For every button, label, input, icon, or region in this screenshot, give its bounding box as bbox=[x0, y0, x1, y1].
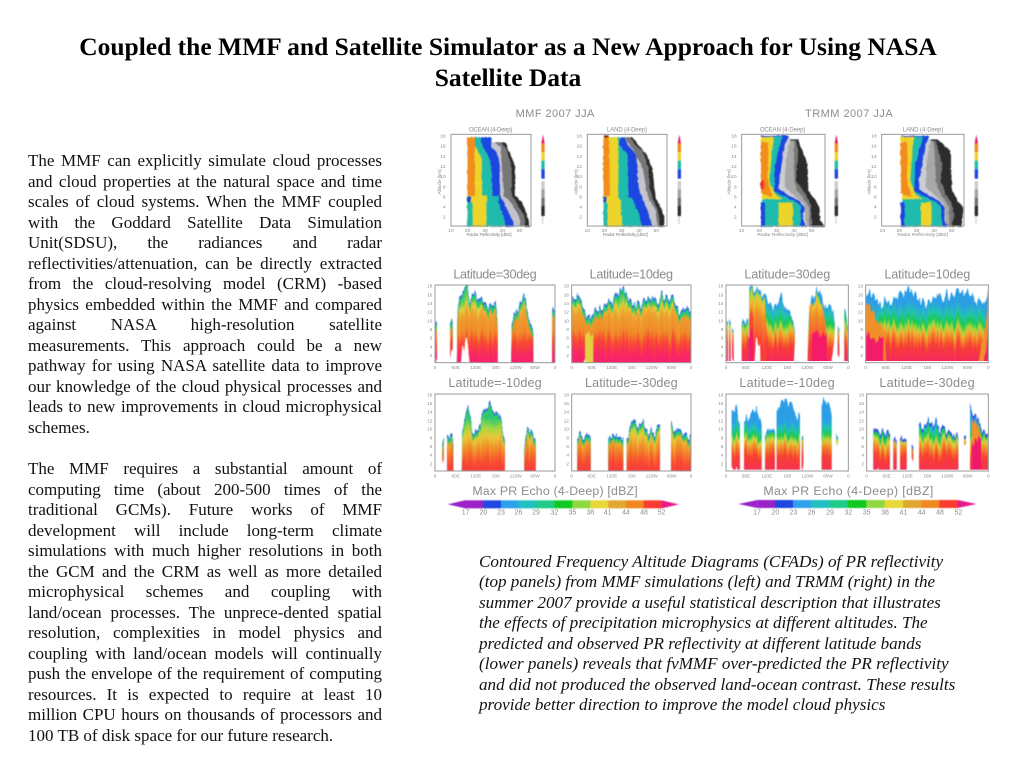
text block: future works paragraph: million CPU hours on thousands of processors and bbox=[28, 705, 382, 724]
chart: MMF ocean CFAD: 18 bbox=[440, 133, 446, 139]
legend: MMF colour bar: 20 bbox=[479, 510, 487, 517]
chart: MMF latitude 10: 16 bbox=[564, 292, 569, 297]
chart: MMF latitude 30 bbox=[428, 269, 556, 369]
chart: TRMM latitude -30: 6 bbox=[861, 444, 864, 449]
chart: MMF ocean CFAD: 14 bbox=[440, 154, 446, 160]
chart: TRMM latitude 10: 12 bbox=[858, 310, 863, 315]
legend: TRMM colour bar: 48 bbox=[936, 510, 944, 517]
chart: TRMM land CFAD: 10 bbox=[871, 174, 877, 180]
legend: MMF colour bar: 23 bbox=[497, 510, 505, 517]
legend title: TRMM max PR echo: Max PR Echo (4-Deep) [dBZ] bbox=[763, 484, 933, 498]
chart: TRMM latitude 10: 120E bbox=[901, 365, 912, 370]
text block: MMF approach paragraph: Unit(SDSU), the radiances and radar bbox=[28, 233, 382, 252]
text block: MMF approach paragraph bbox=[28, 151, 382, 436]
chart: TRMM land CFAD: 2 bbox=[874, 214, 877, 220]
chart: TRMM latitude 10: 0 bbox=[864, 365, 867, 370]
chart: TRMM latitude -10: 10 bbox=[718, 427, 724, 432]
chart: TRMM latitude 30: 0 bbox=[847, 365, 850, 370]
chart: MMF land CFAD: 6 bbox=[579, 194, 582, 200]
chart: TRMM latitude -10: 12 bbox=[718, 418, 724, 423]
chart: TRMM land CFAD: 30 bbox=[914, 228, 920, 234]
chart: TRMM latitude -30 bbox=[859, 376, 990, 483]
caption: (top panels) from MMF simulations (left) and TRMM (right) in the bbox=[479, 572, 935, 591]
chart: TRMM ocean CFAD: 6 bbox=[734, 194, 737, 200]
chart: TRMM land CFAD: 40 bbox=[931, 228, 937, 234]
chart: TRMM latitude -30: 60E bbox=[883, 473, 891, 478]
title: Coupled the MMF and Satellite Simulator as a New Approach for Using NASA bbox=[79, 32, 937, 61]
chart: TRMM ocean CFAD: OCEAN (4-Deep) bbox=[760, 127, 805, 133]
legend: TRMM colour bar: 23 bbox=[789, 510, 797, 517]
chart: MMF latitude -30: 18 bbox=[564, 392, 569, 397]
chart: MMF latitude 10: 180 bbox=[628, 365, 636, 370]
chart: TRMM land CFAD: 20 bbox=[897, 228, 902, 234]
chart: TRMM latitude -30: 16 bbox=[859, 401, 864, 406]
chart: TRMM land CFAD: 4 bbox=[874, 204, 877, 210]
chart: TRMM ocean CFAD: 20 bbox=[757, 228, 762, 234]
caption: (lower panels) reveals that fvMMF over-predicted the PR reflectivity bbox=[479, 654, 949, 673]
chart: MMF latitude 30: 0 bbox=[434, 365, 437, 370]
text block: MMF approach paragraph: physics embedded within the MMF and compared bbox=[28, 294, 382, 314]
chart: TRMM land CFAD: 8 bbox=[874, 184, 877, 190]
chart: MMF latitude 30: 16 bbox=[427, 292, 433, 297]
chart: MMF latitude 30: 60W bbox=[530, 365, 540, 370]
chart: MMF latitude -30: 60E bbox=[588, 473, 596, 478]
chart: MMF latitude -10: Latitude=-10deg bbox=[448, 376, 542, 390]
chart: MMF land CFAD: 4 bbox=[579, 204, 582, 210]
legend: TRMM colour bar: 35 bbox=[863, 510, 871, 517]
legend: MMF colour bar: 48 bbox=[640, 510, 648, 517]
chart: TRMM latitude -10: 120E bbox=[761, 473, 772, 478]
chart: MMF latitude -10: 6 bbox=[430, 444, 433, 449]
chart: MMF latitude 30: 8 bbox=[430, 327, 433, 332]
chart: TRMM latitude 30: Latitude=30deg bbox=[744, 268, 830, 282]
legend: MMF colour bar: 35 bbox=[568, 510, 576, 517]
legend: TRMM colour bar: 44 bbox=[918, 510, 926, 517]
text block: future works paragraph: The MMF requires a substantial amount of bbox=[28, 459, 382, 478]
legend: MMF colour bar: 38 bbox=[586, 510, 594, 517]
chart: MMF latitude 10: 18 bbox=[564, 284, 569, 289]
title: Satellite Data bbox=[435, 63, 581, 92]
chart: MMF land CFAD: 20 bbox=[602, 228, 607, 234]
chart: TRMM ocean CFAD: 4 bbox=[734, 204, 737, 210]
chart: TRMM land CFAD: 18 bbox=[871, 133, 877, 139]
chart: MMF latitude -10: 120W bbox=[510, 473, 522, 478]
chart: MMF ocean CFAD: 10 bbox=[440, 174, 446, 180]
legend: TRMM colour bar: 41 bbox=[899, 510, 907, 517]
legend: TRMM colour bar: 52 bbox=[954, 510, 962, 517]
text block: MMF approach paragraph: The MMF can explicitly simulate cloud processes bbox=[28, 151, 382, 170]
chart: TRMM latitude -30: 4 bbox=[861, 453, 864, 458]
chart: MMF latitude -30: 8 bbox=[566, 435, 569, 440]
chart: MMF latitude 10: Latitude=10deg bbox=[590, 268, 673, 282]
group: TRMM latitude sections bbox=[718, 268, 990, 517]
chart: TRMM latitude -10: 60E bbox=[742, 473, 750, 478]
chart: MMF latitude 30: 18 bbox=[427, 284, 433, 289]
chart: TRMM latitude 10: 6 bbox=[860, 336, 863, 341]
chart: MMF latitude 10: 10 bbox=[564, 318, 569, 323]
chart: TRMM latitude -10: 60W bbox=[823, 473, 833, 478]
figure: CFADs and latitude sections bbox=[428, 110, 990, 514]
chart: MMF latitude -10 bbox=[428, 378, 556, 478]
chart: TRMM land CFAD: 16 bbox=[871, 144, 877, 150]
chart: TRMM land CFAD: 14 bbox=[871, 154, 877, 160]
chart: MMF latitude -30: 12 bbox=[564, 418, 569, 423]
chart: TRMM latitude -30: 180 bbox=[923, 473, 932, 478]
chart: MMF latitude -30: 0 bbox=[570, 473, 573, 478]
text block: future works paragraph: the GCM and the CRM as well as more detailed bbox=[28, 562, 382, 580]
chart: MMF latitude 30: 14 bbox=[427, 301, 433, 306]
chart: MMF latitude -10: 8 bbox=[430, 435, 433, 440]
chart: TRMM latitude -10: 8 bbox=[721, 435, 724, 440]
text block: MMF approach paragraph: against NASA high-resolution satellite bbox=[28, 315, 382, 334]
chart: TRMM ocean CFAD: 8 bbox=[734, 184, 737, 190]
legend: MMF colour bar: 26 bbox=[514, 510, 522, 517]
group: CFAD panels MMF bbox=[437, 108, 681, 238]
chart: MMF latitude -30: 16 bbox=[564, 401, 569, 406]
chart: MMF ocean CFAD bbox=[437, 127, 531, 238]
chart: MMF latitude -30: 6 bbox=[566, 444, 569, 449]
text block: future works paragraph: coupling with land/ocean models will continually bbox=[28, 644, 382, 662]
chart: MMF latitude 10 bbox=[564, 269, 692, 369]
chart: TRMM land CFAD: Altitude [km] bbox=[867, 169, 873, 195]
chart: TRMM latitude -10: 2 bbox=[721, 461, 724, 466]
chart: TRMM ocean CFAD: 30 bbox=[774, 228, 780, 234]
chart: TRMM land CFAD: 12 bbox=[871, 164, 877, 170]
text block: MMF approach paragraph: scales of cloud systems. When the MMF coupled bbox=[28, 192, 382, 211]
chart: TRMM latitude 10: 0 bbox=[987, 365, 990, 370]
chart: TRMM latitude 30: 60W bbox=[823, 365, 833, 370]
chart: MMF ocean CFAD: 6 bbox=[443, 194, 446, 200]
text block: future works paragraph: development will include long-term climate bbox=[28, 520, 382, 540]
chart: MMF latitude 30: 60E bbox=[452, 365, 460, 370]
chart: TRMM latitude 10: 8 bbox=[860, 327, 863, 332]
chart: TRMM latitude 30: 6 bbox=[721, 336, 724, 341]
chart: MMF ocean CFAD: 4 bbox=[443, 204, 446, 210]
title bbox=[79, 32, 937, 92]
chart: MMF ocean CFAD: 12 bbox=[440, 164, 446, 170]
chart: MMF latitude -10: 14 bbox=[427, 410, 433, 415]
chart: MMF land CFAD: 14 bbox=[576, 154, 582, 160]
chart: MMF land CFAD: LAND (4-Deep) bbox=[607, 127, 647, 133]
chart: TRMM latitude 30: 16 bbox=[718, 292, 724, 297]
chart: MMF latitude -10: 0 bbox=[554, 473, 557, 478]
chart: MMF latitude 30: 180 bbox=[492, 365, 500, 370]
chart: MMF latitude -30: 120W bbox=[646, 473, 658, 478]
chart: TRMM latitude -30: 10 bbox=[859, 427, 864, 432]
chart: TRMM land CFAD: LAND (4-Deep) bbox=[903, 127, 943, 133]
chart: MMF land CFAD: 10 bbox=[576, 174, 582, 180]
chart: TRMM latitude 10 bbox=[858, 268, 990, 377]
chart: MMF latitude -10: 12 bbox=[427, 418, 433, 423]
caption: predicted and observed PR reflectivity at different latitude bands bbox=[479, 634, 921, 653]
chart: TRMM latitude -30: 0 bbox=[987, 473, 990, 478]
chart: MMF land CFAD: 2 bbox=[579, 214, 582, 220]
chart: MMF latitude -30: 2 bbox=[566, 461, 569, 466]
text block: future works paragraph: resolution, complexities in model physics and bbox=[28, 623, 382, 642]
caption: provide better direction to improve the model cloud physics bbox=[479, 695, 885, 714]
text block: future works paragraph: land/ocean processes. The unprece-dented spatial bbox=[28, 602, 382, 622]
legend: MMF land colour scale bbox=[678, 134, 681, 224]
chart: TRMM land CFAD: Radar Reflectivity [dBZ] bbox=[897, 232, 949, 238]
chart: TRMM latitude -30: 120W bbox=[941, 473, 954, 478]
chart: TRMM latitude 30: 4 bbox=[721, 344, 724, 349]
chart: MMF latitude -30: 60W bbox=[667, 473, 677, 478]
chart: MMF ocean CFAD: Radar Reflectivity [dBZ] bbox=[466, 232, 512, 238]
chart: TRMM latitude -10: 18 bbox=[718, 392, 724, 397]
legend: TRMM colour bar: 38 bbox=[881, 510, 889, 517]
chart: MMF ocean CFAD: 2 bbox=[443, 214, 446, 220]
chart: TRMM latitude -30: 12 bbox=[859, 418, 864, 423]
chart: MMF ocean CFAD: 8 bbox=[443, 184, 446, 190]
chart: MMF ocean CFAD: 20 bbox=[465, 228, 471, 234]
chart: MMF land CFAD: 18 bbox=[576, 133, 582, 139]
chart: MMF latitude -30: 10 bbox=[564, 427, 569, 432]
chart: MMF latitude 30: 4 bbox=[430, 344, 433, 349]
chart: MMF latitude 30: 2 bbox=[430, 353, 433, 358]
text block: future works paragraph: resources. It is expected to require at least 10 bbox=[28, 684, 382, 704]
chart: TRMM ocean CFAD: 2 bbox=[734, 214, 737, 220]
chart: MMF latitude -10: 2 bbox=[430, 461, 433, 466]
chart: MMF land CFAD: 12 bbox=[576, 164, 582, 170]
chart: TRMM latitude -30: 8 bbox=[861, 435, 864, 440]
text block: MMF approach paragraph: measurements. This approach could be a new bbox=[28, 336, 382, 354]
chart: MMF latitude -10: 0 bbox=[434, 473, 437, 478]
chart: TRMM latitude -10: 180 bbox=[783, 473, 792, 478]
chart: MMF latitude -30: 4 bbox=[566, 453, 569, 458]
text block: MMF approach paragraph: schemes. bbox=[28, 418, 90, 436]
chart: MMF ocean CFAD: 50 bbox=[517, 228, 523, 234]
chart: MMF latitude 30: 0 bbox=[554, 365, 557, 370]
legend: TRMM colour bar: 29 bbox=[826, 510, 834, 517]
chart: TRMM latitude 30: 12 bbox=[718, 310, 724, 315]
chart: TRMM ocean CFAD: Radar Reflectivity [dBZ] bbox=[757, 232, 809, 238]
chart: MMF latitude -10: 10 bbox=[427, 427, 433, 432]
chart: TRMM latitude 10: 120W bbox=[941, 365, 954, 370]
caption: summer 2007 provide a useful statistical description that illustrates bbox=[479, 593, 941, 612]
chart: MMF latitude -30 bbox=[564, 376, 693, 487]
chart: TRMM ocean CFAD: 16 bbox=[731, 144, 737, 150]
heading: TRMM 2007 JJA: TRMM 2007 JJA bbox=[805, 108, 893, 120]
chart: TRMM latitude 10: 16 bbox=[858, 292, 863, 297]
chart: TRMM latitude -10: 120W bbox=[801, 473, 814, 478]
chart: TRMM latitude 30: 120E bbox=[761, 365, 772, 370]
chart: MMF latitude 10: 0 bbox=[690, 365, 693, 370]
chart: MMF latitude -30: Latitude=-30deg bbox=[585, 376, 678, 390]
chart: MMF latitude 30: 120E bbox=[470, 365, 481, 370]
chart: MMF ocean CFAD: 16 bbox=[440, 144, 446, 150]
chart: MMF latitude -10: 180 bbox=[492, 473, 500, 478]
legend: MMF colour bar: 52 bbox=[658, 510, 666, 517]
chart: TRMM ocean CFAD bbox=[727, 127, 825, 238]
chart: TRMM latitude -10: 4 bbox=[721, 453, 724, 458]
legend: TRMM ocean colour scale bbox=[835, 134, 838, 224]
chart: TRMM latitude -30: 120E bbox=[902, 473, 913, 478]
legend: TRMM land colour scale bbox=[975, 134, 978, 224]
chart: TRMM latitude 30: 120W bbox=[801, 365, 814, 370]
chart: TRMM land CFAD: 6 bbox=[874, 194, 877, 200]
chart: TRMM land CFAD bbox=[867, 127, 964, 238]
chart: MMF land CFAD: 30 bbox=[619, 228, 625, 234]
chart: TRMM ocean CFAD: 40 bbox=[791, 228, 797, 234]
text block: future works paragraph: computing time (about 200-500 times of the bbox=[28, 480, 382, 498]
chart: MMF latitude 30: 120W bbox=[510, 365, 522, 370]
chart: MMF ocean CFAD: 30 bbox=[482, 228, 488, 234]
legend: TRMM colour bar: 32 bbox=[844, 510, 852, 517]
chart: TRMM latitude 30: 2 bbox=[721, 353, 724, 358]
chart: MMF latitude 10: 120W bbox=[646, 365, 658, 370]
chart: TRMM latitude -10: 0 bbox=[725, 473, 728, 478]
chart: MMF latitude -10: 60W bbox=[530, 473, 540, 478]
chart: MMF ocean CFAD: OCEAN (4-Deep) bbox=[469, 127, 512, 133]
chart: MMF latitude 10: 6 bbox=[566, 336, 569, 341]
text block: future works paragraph bbox=[28, 459, 382, 744]
chart: TRMM latitude 10: 14 bbox=[858, 301, 863, 306]
chart: MMF latitude 30: 10 bbox=[427, 318, 433, 323]
chart: TRMM land CFAD: 50 bbox=[949, 228, 955, 234]
legend: MMF colour bar: 44 bbox=[622, 510, 630, 517]
chart: MMF land CFAD: 8 bbox=[579, 184, 582, 190]
legend: MMF colour bar: 32 bbox=[550, 510, 558, 517]
chart: TRMM latitude -30: 2 bbox=[861, 461, 864, 466]
caption bbox=[478, 552, 955, 714]
chart: MMF land CFAD: 10 bbox=[585, 228, 590, 234]
chart: MMF latitude 30: 12 bbox=[427, 310, 433, 315]
legend: TRMM colour bar: 26 bbox=[808, 510, 816, 517]
chart: TRMM latitude -30: 14 bbox=[859, 410, 864, 415]
chart: TRMM ocean CFAD: 18 bbox=[731, 133, 737, 139]
chart: MMF latitude 10: 0 bbox=[570, 365, 573, 370]
text block: future works paragraph: push the envelope of the requirement of computing bbox=[28, 664, 382, 683]
text block: MMF approach paragraph: and cloud properties at the natural space and time bbox=[28, 172, 382, 190]
chart: MMF latitude 10: 14 bbox=[564, 301, 569, 306]
text block: future works paragraph: microphysical schemes and coupling with bbox=[28, 582, 382, 601]
chart: MMF latitude 10: 120E bbox=[606, 365, 617, 370]
text block: MMF approach paragraph: from the cloud-resolving model (CRM) -based bbox=[28, 274, 382, 293]
chart: TRMM latitude -10: 14 bbox=[718, 410, 724, 415]
chart: MMF latitude -30: 120E bbox=[606, 473, 617, 478]
chart: MMF ocean CFAD: 10 bbox=[448, 228, 454, 234]
chart: MMF land CFAD bbox=[573, 127, 667, 238]
text block: future works paragraph: 100 TB of disk space for our future research. bbox=[28, 726, 333, 744]
legend: MMF ocean colour scale bbox=[541, 134, 545, 224]
chart: MMF latitude -30: 14 bbox=[564, 410, 569, 415]
chart: TRMM latitude 10: 4 bbox=[860, 344, 863, 349]
group: MMF latitude sections bbox=[427, 268, 693, 517]
chart: MMF latitude 10: 60W bbox=[667, 365, 677, 370]
chart: MMF latitude 10: 60E bbox=[588, 365, 596, 370]
legend: TRMM colour bar: 17 bbox=[753, 510, 761, 517]
chart: MMF latitude -10: 18 bbox=[427, 392, 433, 397]
chart: TRMM latitude 30: 10 bbox=[718, 318, 724, 323]
legend: MMF colour bar: 17 bbox=[462, 510, 470, 517]
legend title: MMF max PR echo: Max PR Echo (4-Deep) [dBZ] bbox=[472, 484, 638, 498]
chart: MMF latitude 30: Latitude=30deg bbox=[453, 268, 537, 282]
chart: MMF latitude -10: 16 bbox=[427, 401, 433, 406]
chart: TRMM latitude 10: 18 bbox=[858, 284, 863, 289]
chart: TRMM ocean CFAD: 10 bbox=[739, 228, 745, 234]
chart: TRMM latitude 10: 60W bbox=[963, 365, 973, 370]
chart: TRMM ocean CFAD: Altitude [km] bbox=[727, 169, 733, 195]
caption: Contoured Frequency Altitude Diagrams (CFADs) of PR reflectivity bbox=[479, 552, 943, 571]
chart: TRMM latitude -30: 18 bbox=[859, 392, 864, 397]
chart: TRMM ocean CFAD: 12 bbox=[731, 164, 737, 170]
chart: TRMM latitude 10: 2 bbox=[860, 353, 863, 358]
chart: MMF latitude 10: 4 bbox=[566, 344, 569, 349]
caption: and did not produced the observed land-ocean contrast. These results bbox=[479, 675, 955, 694]
text block: MMF approach paragraph: leads to new improvements in cloud microphysical bbox=[28, 397, 382, 416]
chart: MMF land CFAD: Altitude [km] bbox=[573, 169, 579, 195]
chart: TRMM latitude -10: 0 bbox=[847, 473, 850, 478]
caption: the effects of precipitation microphysics at different altitudes. The bbox=[479, 613, 928, 632]
chart: MMF ocean CFAD: Altitude [km] bbox=[437, 169, 443, 195]
chart: MMF latitude -30: 0 bbox=[690, 473, 693, 478]
chart: MMF latitude 10: 8 bbox=[566, 327, 569, 332]
chart: TRMM latitude -30: 60W bbox=[963, 473, 973, 478]
chart: MMF land CFAD: 40 bbox=[636, 228, 642, 234]
legend: MMF colour bar: 41 bbox=[604, 510, 612, 517]
chart: TRMM latitude 30: 0 bbox=[725, 365, 728, 370]
text block: MMF approach paragraph: pathway for using NASA satellite data to improve bbox=[28, 356, 382, 375]
chart: TRMM latitude 10: 180 bbox=[923, 365, 932, 370]
chart: MMF ocean CFAD: 40 bbox=[500, 228, 505, 234]
chart: MMF land CFAD: 16 bbox=[576, 144, 582, 150]
chart: TRMM latitude 10: 60E bbox=[882, 365, 890, 370]
text block: future works paragraph: traditional GCMs). Future works of MMF bbox=[28, 500, 382, 519]
chart: TRMM latitude -30: 0 bbox=[865, 473, 868, 478]
chart: MMF land CFAD: Radar Reflectivity [dBZ] bbox=[603, 232, 649, 238]
chart: TRMM latitude 30 bbox=[718, 268, 850, 377]
chart: TRMM latitude 10: 10 bbox=[858, 318, 863, 323]
text block: future works paragraph: simulations with much higher resolutions in both bbox=[28, 541, 382, 560]
chart: MMF latitude -10: 120E bbox=[470, 473, 481, 478]
legend: MMF colour bar: 29 bbox=[532, 510, 540, 517]
heading: MMF 2007 JJA: MMF 2007 JJA bbox=[516, 108, 595, 120]
group: CFAD panels TRMM bbox=[727, 108, 978, 238]
chart: MMF latitude -10: 60E bbox=[452, 473, 460, 478]
chart: MMF latitude -10: 4 bbox=[430, 453, 433, 458]
legend: TRMM colour bar bbox=[738, 500, 977, 517]
chart: MMF land CFAD: 50 bbox=[654, 228, 659, 234]
chart: TRMM latitude 30: 8 bbox=[721, 327, 724, 332]
chart: TRMM latitude 10: Latitude=10deg bbox=[884, 268, 970, 282]
chart: TRMM latitude -30: Latitude=-30deg bbox=[879, 376, 975, 390]
text block: MMF approach paragraph: reflectivities/attenuation, can be directly extracted bbox=[28, 254, 382, 272]
legend: MMF colour bar bbox=[448, 500, 679, 517]
chart: MMF latitude 10: 12 bbox=[564, 310, 569, 315]
chart: TRMM ocean CFAD: 14 bbox=[731, 154, 737, 160]
chart: MMF latitude -30: 180 bbox=[628, 473, 636, 478]
chart: TRMM latitude -10: 16 bbox=[718, 401, 724, 406]
text block: MMF approach paragraph: our knowledge of the cloud physical processes and bbox=[28, 376, 382, 396]
chart: TRMM latitude -10: 6 bbox=[721, 444, 724, 449]
chart: TRMM latitude -10 bbox=[718, 376, 850, 483]
chart: MMF latitude 30: 6 bbox=[430, 336, 433, 341]
chart: TRMM ocean CFAD: 50 bbox=[809, 228, 815, 234]
chart: TRMM latitude 30: 14 bbox=[718, 301, 724, 306]
text block: MMF approach paragraph: with the Goddard Satellite Data Simulation bbox=[28, 212, 382, 232]
chart: TRMM latitude 30: 180 bbox=[783, 365, 792, 370]
chart: MMF latitude 10: 2 bbox=[566, 353, 569, 358]
chart: TRMM land CFAD: 10 bbox=[880, 228, 885, 234]
legend: TRMM colour bar: 20 bbox=[771, 510, 779, 517]
chart: TRMM latitude -10: Latitude=-10deg bbox=[739, 376, 835, 390]
chart: TRMM latitude 30: 18 bbox=[718, 284, 724, 289]
chart: TRMM ocean CFAD: 10 bbox=[731, 174, 737, 180]
chart: TRMM latitude 30: 60E bbox=[742, 365, 750, 370]
